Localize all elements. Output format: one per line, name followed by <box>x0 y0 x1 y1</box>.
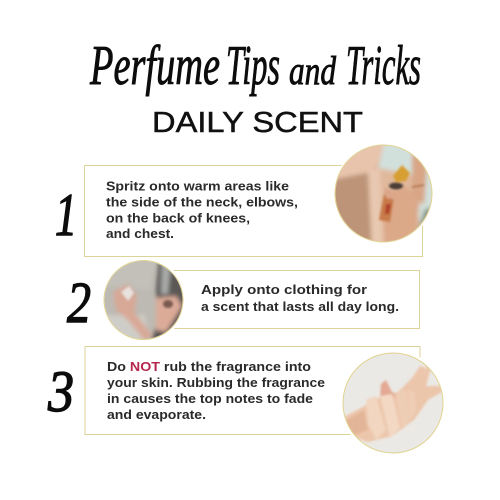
title: and <box>289 48 337 93</box>
tip 1 box <box>84 166 422 256</box>
tip 1 text: the side of the neck, elbows, <box>106 194 298 210</box>
title: Tips <box>226 35 280 97</box>
tip 3 text: Do NOT rub the fragrance into <box>107 359 311 374</box>
tip 2 box <box>166 270 420 328</box>
tip 1 text: and chest. <box>106 226 174 241</box>
tip 3 text: your skin. Rubbing the fragrance <box>107 375 325 390</box>
tip 2 text <box>201 282 399 314</box>
tip 3 text: in causes the top notes to fade <box>107 391 313 406</box>
tip 2 text: a scent that lasts all day long. <box>201 299 399 314</box>
tip 1 number: 1 <box>55 182 77 248</box>
tip 1 text <box>106 178 298 241</box>
tip 2 text: Apply onto clothing for <box>201 282 367 297</box>
tip 2 number: 2 <box>67 270 91 335</box>
panel: tip 3 <box>47 346 446 456</box>
tip 3 box <box>85 346 420 434</box>
tip 3 number: 3 <box>47 359 74 424</box>
tip 1 text: on the back of knees, <box>106 210 250 226</box>
tip 3 text: and evaporate. <box>107 407 206 422</box>
tip 2 photo <box>104 260 184 340</box>
panel: tip 2 <box>67 258 420 345</box>
tip 3 text <box>107 359 325 422</box>
subtitle: DAILY SCENT <box>152 107 363 139</box>
panel: tip 1 <box>55 140 440 256</box>
tip 1 photo <box>334 144 432 242</box>
title: Tricks <box>346 35 421 97</box>
tip 1 text: Spritz onto warm areas like <box>106 178 289 194</box>
tip 3 photo <box>340 350 446 456</box>
title: Perfume <box>89 35 220 97</box>
title <box>89 35 421 97</box>
